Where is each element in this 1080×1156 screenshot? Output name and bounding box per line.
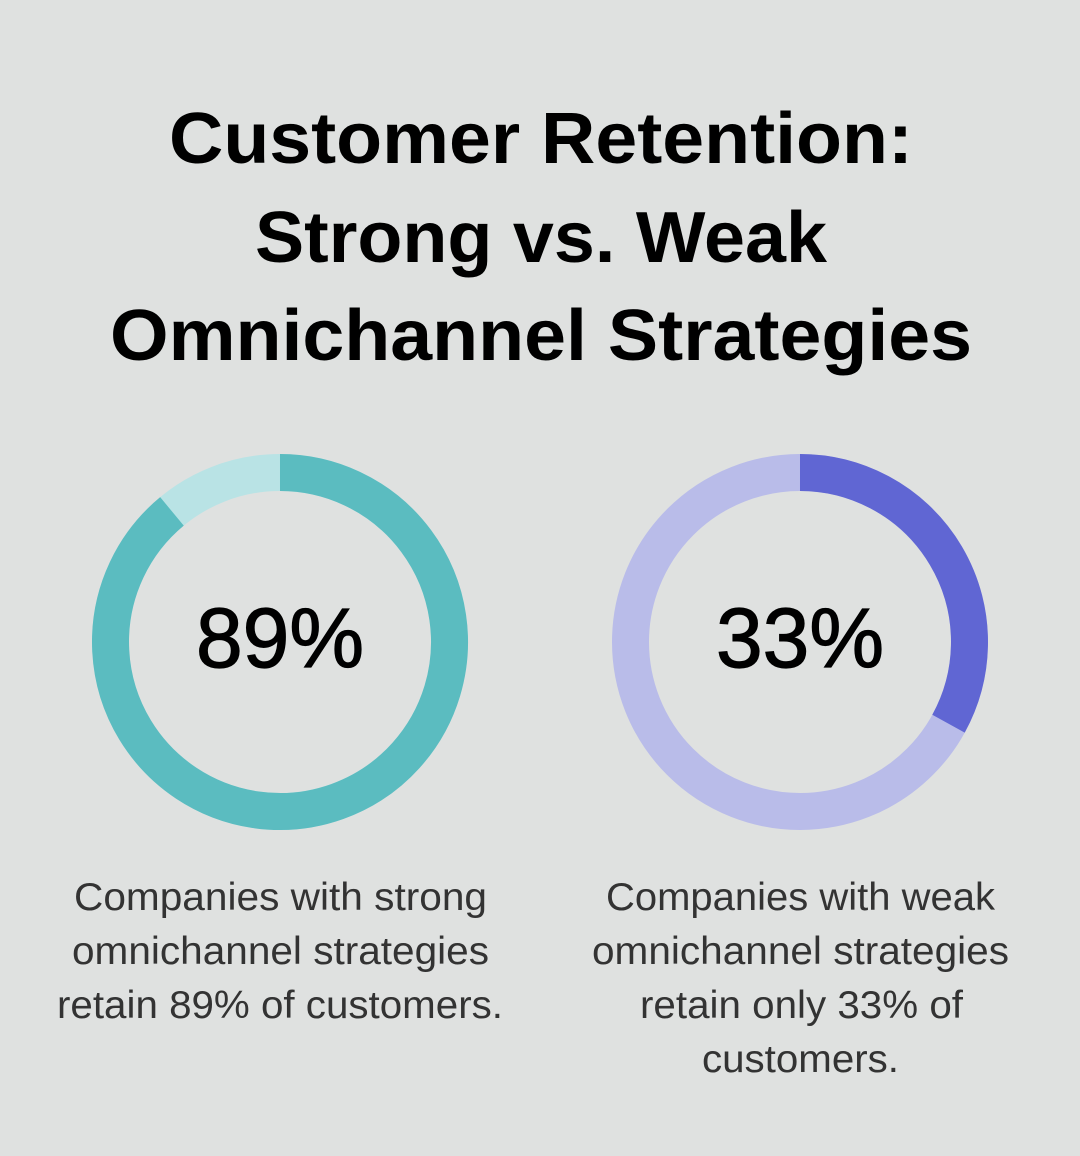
donut chart: 33%	[630, 472, 970, 812]
title	[110, 99, 972, 376]
description: strong strategies: Companies with strong	[74, 876, 487, 919]
description: strong strategies: retain 89% of customers.	[57, 984, 503, 1027]
value: 89%: 89%	[196, 591, 364, 685]
description: weak strategies	[592, 876, 1009, 1081]
title: Omnichannel Strategies	[110, 296, 972, 376]
description: strong strategies: omnichannel strategies	[72, 930, 489, 973]
description: strong strategies	[57, 876, 503, 1027]
description: weak strategies: Companies with weak	[606, 876, 996, 919]
title: Customer Retention:	[169, 99, 913, 179]
title: Strong vs. Weak	[255, 198, 828, 278]
value: 33%: 33%	[716, 591, 884, 685]
description: weak strategies: retain only 33% of	[640, 984, 963, 1027]
description: weak strategies: customers.	[702, 1038, 899, 1081]
panel: strong omnichannel strategies	[57, 472, 503, 1027]
panel: weak omnichannel strategies	[592, 472, 1009, 1081]
donut chart: 89%	[110, 472, 450, 812]
description: weak strategies: omnichannel strategies	[592, 930, 1009, 973]
